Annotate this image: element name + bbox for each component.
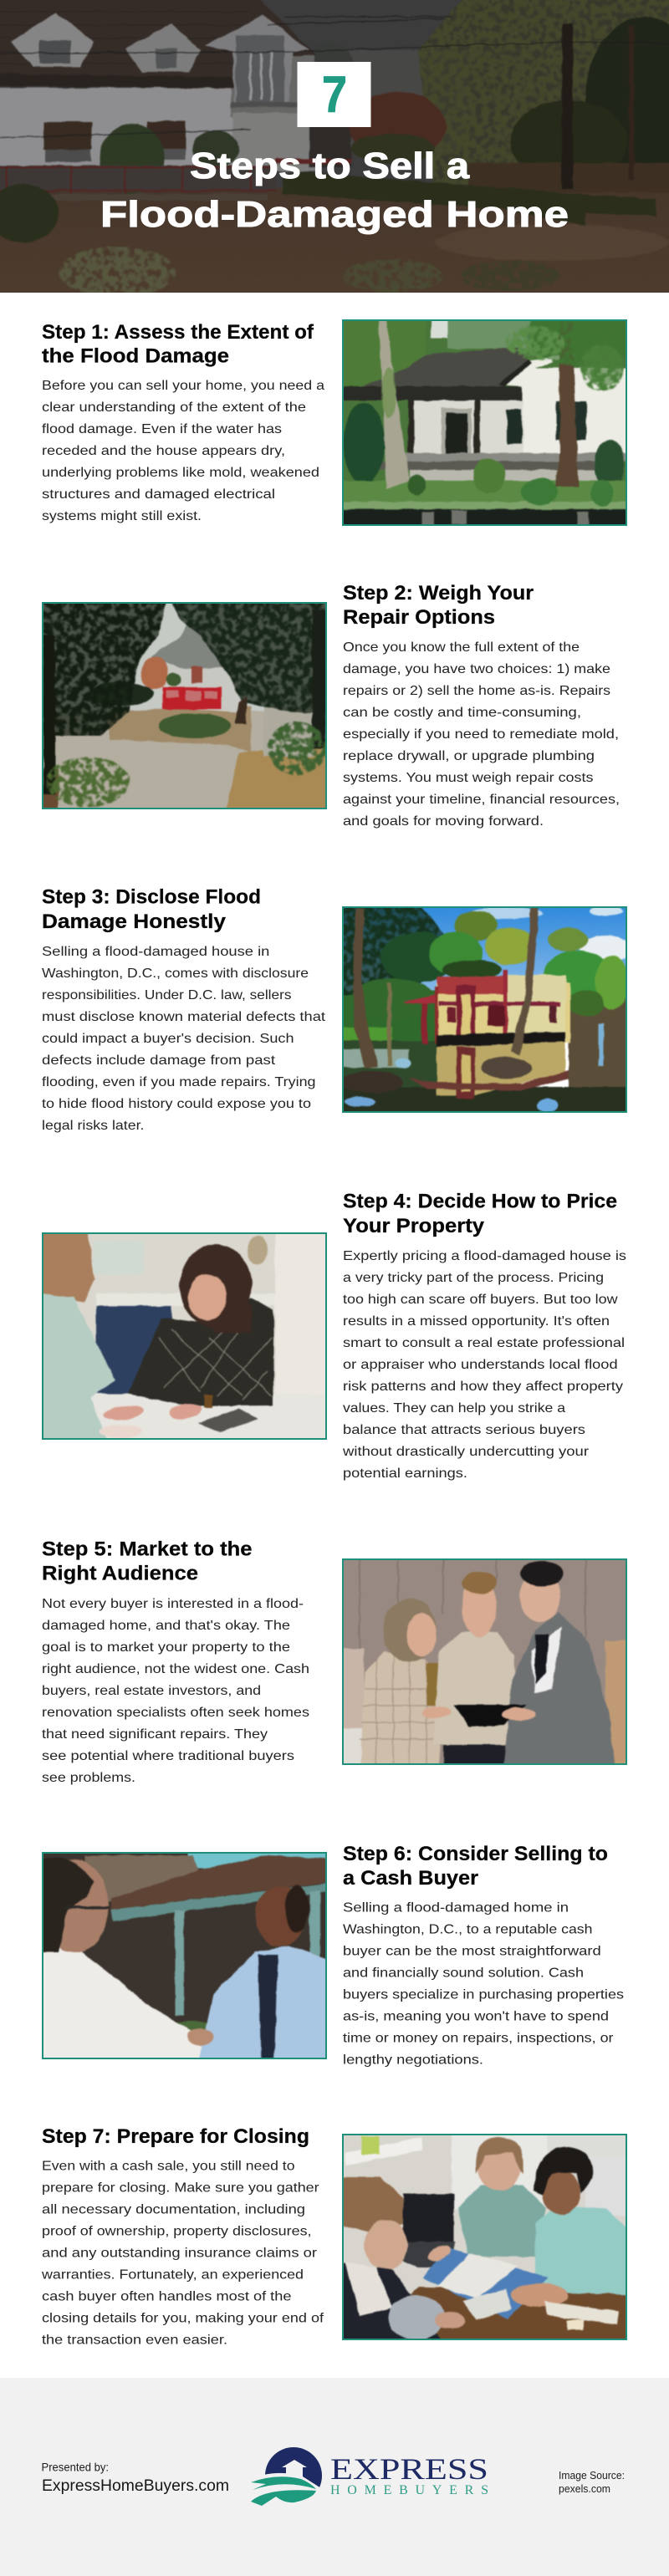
step 4 text: Expertly pricing a flood-damaged house is: [343, 1249, 626, 1263]
step 5 heading: Right Audience: [42, 1563, 198, 1585]
step 2 text: especially if you need to remediate mold,: [343, 727, 619, 742]
step 4 photo: woman reviewing paperwork: [38, 1229, 331, 1443]
step 3 heading: [42, 886, 261, 933]
step 3 text: responsibilities. Under D.C. law, sellers: [42, 988, 292, 1002]
presented by: ExpressHomeBuyers.com: [42, 2477, 229, 2495]
step 4 text: values. They can help you strike a: [343, 1401, 565, 1416]
step 1 text: structures and damaged electrical: [42, 487, 275, 502]
step 3 text: Washington, D.C., comes with disclosure: [42, 967, 309, 981]
step 2 text: against your timeline, financial resources,: [343, 793, 620, 807]
number badge: [298, 62, 371, 127]
step 1 text: clear understanding of the extent of the: [42, 400, 306, 415]
presented by: [42, 2460, 229, 2495]
step 7 text: prepare for closing. Make sure you gather: [42, 2181, 319, 2196]
step 6 text: lengthy negotiations.: [343, 2053, 483, 2067]
step 3 text: defects include damage from past: [42, 1053, 276, 1068]
step 2 heading: Step 2: Weigh Your: [343, 582, 534, 604]
step 7 text: the transaction even easier.: [42, 2333, 227, 2348]
step 6 text: [343, 1901, 624, 2067]
step 6 text: Selling a flood-damaged home in: [343, 1901, 569, 1915]
step 4 text: [342, 1249, 626, 1481]
step 3 text: [42, 945, 326, 1133]
step 4: [38, 1191, 626, 1481]
step 2 text: systems. You must weigh repair costs: [343, 771, 594, 785]
step 1 heading: [42, 321, 314, 368]
step 1 heading: the Flood Damage: [42, 344, 229, 368]
step 6 text: time or money on repairs, inspections, or: [343, 2032, 614, 2045]
step 7 photo: closing meeting at desk: [339, 2130, 631, 2344]
step 5 text: Not every buyer is interested in a flood-: [42, 1597, 304, 1611]
title: Flood-Damaged Home: [100, 194, 569, 235]
step 7 text: proof of ownership, property disclosures,: [42, 2224, 311, 2239]
step 4 heading: Your Property: [343, 1215, 484, 1237]
step 7 text: cash buyer often handles most of the: [42, 2289, 291, 2304]
step 1 heading: Step 1: Assess the Extent of: [42, 321, 314, 344]
step 6 text: as-is, meaning you won't have to spend: [343, 2010, 609, 2023]
step 2 text: [343, 640, 620, 829]
step 2 text: replace drywall, or upgrade plumbing: [343, 749, 595, 763]
logo wordmark: EXPRESS: [330, 2452, 488, 2486]
step 1 text: systems might still exist.: [42, 509, 202, 523]
step 5 text: buyers, real estate investors, and: [42, 1684, 261, 1698]
step 5 text: renovation specialists often seek homes: [42, 1706, 309, 1720]
step 5 text: that need significant repairs. They: [42, 1727, 268, 1742]
step 4 text: smart to consult a real estate professional: [343, 1336, 625, 1350]
step 2 photo: flooded street with trees: [38, 599, 331, 813]
step 2 text: damage, you have two choices: 1) make: [343, 662, 610, 676]
step 4 text: without drastically undercutting your: [342, 1445, 589, 1459]
number badge: 7: [322, 66, 347, 123]
step 6 photo: handshake in front of house: [38, 1849, 331, 2063]
step 3 text: must disclose known material defects that: [42, 1010, 326, 1024]
step 5 text: [42, 1597, 309, 1785]
step 1: [42, 319, 627, 526]
step 1 text: underlying problems like mold, weakened: [42, 466, 319, 480]
logo wordmark: [330, 2452, 488, 2497]
step 7: [41, 2125, 631, 2348]
step 3 text: legal risks later.: [42, 1119, 144, 1133]
header photo: flooded house: [0, 0, 669, 318]
step 3 heading: Step 3: Disclose Flood: [42, 886, 261, 908]
step 2 text: Once you know the full extent of the: [343, 640, 580, 655]
step 3 heading: Damage Honestly: [42, 911, 226, 933]
step 1 text: Before you can sell your home, you need a: [42, 379, 324, 393]
step 4 heading: Step 4: Decide How to Price: [343, 1191, 617, 1213]
step 1 text: receded and the house appears dry,: [42, 444, 285, 458]
logo: [248, 2447, 488, 2507]
step 2 text: and goals for moving forward.: [343, 814, 544, 829]
step 5 photo: three people with clipboard: [339, 1555, 631, 1768]
step 6 text: buyers specialize in purchasing properties: [343, 1988, 624, 2002]
step 3 text: to hide flood history could expose you to: [42, 1097, 311, 1111]
step 4 text: balance that attracts serious buyers: [343, 1423, 585, 1437]
step 5 text: damaged home, and that's okay. The: [42, 1619, 290, 1633]
step 6 text: and financially sound solution. Cash: [343, 1966, 584, 1980]
step 7 text: Even with a cash sale, you still need to: [42, 2159, 295, 2174]
presented by: Presented by:: [42, 2460, 109, 2473]
step 5 text: see potential where traditional buyers: [42, 1749, 294, 1763]
step 2 text: can be costly and time-consuming,: [343, 706, 581, 720]
step 3 text: flooding, even if you made repairs. Trying: [42, 1075, 316, 1089]
step 7 text: warranties. Fortunately, an experienced: [41, 2267, 304, 2283]
step 4 text: risk patterns and how they affect property: [343, 1380, 623, 1394]
step 2 heading: [343, 582, 534, 629]
step 4 text: potential earnings.: [343, 1467, 467, 1481]
step 3 photo: yellow house among palm trees: [339, 903, 633, 1116]
step 5: [42, 1538, 631, 1785]
step 6 heading: [343, 1843, 608, 1890]
footer: [0, 2378, 669, 2576]
title: Steps to Sell a: [190, 145, 470, 186]
step 3 text: could impact a buyer's decision. Such: [42, 1032, 294, 1046]
step 7 text: and any outstanding insurance claims or: [42, 2246, 317, 2261]
step 6: [38, 1843, 624, 2067]
step 5 heading: [42, 1538, 253, 1585]
step 5 text: right audience, not the widest one. Cash: [42, 1662, 309, 1676]
step 1 text: flood damage. Even if the water has: [42, 422, 282, 436]
step 6 heading: a Cash Buyer: [343, 1867, 478, 1890]
step 7 text: all necessary documentation, including: [42, 2202, 305, 2217]
step 6 text: buyer can be the most straightforward: [343, 1945, 601, 1958]
step 6 text: Washington, D.C., to a reputable cash: [343, 1923, 592, 1936]
step 4 heading: [343, 1191, 617, 1237]
step 4 text: results in a missed opportunity. It's often: [343, 1314, 610, 1329]
header banner: [0, 0, 669, 318]
image source: Image Source:: [559, 2469, 625, 2482]
step 1 text: [42, 379, 324, 523]
step 2 heading: Repair Options: [343, 606, 495, 629]
logo wordmark: HOMEBUYERS: [330, 2483, 488, 2497]
step 5 text: see problems.: [42, 1771, 135, 1785]
step 2 text: repairs or 2) sell the home as-is. Repairs: [343, 684, 610, 698]
step 4 text: a very tricky part of the process. Pricing: [343, 1271, 604, 1285]
step 6 heading: Step 6: Consider Selling to: [343, 1843, 608, 1865]
step 7 heading: Step 7: Prepare for Closing: [42, 2125, 309, 2148]
step 7 text: closing details for you, making your end of: [42, 2311, 324, 2326]
step 7 text: [41, 2159, 324, 2348]
step 3 text: Selling a flood-damaged house in: [42, 945, 269, 959]
step 4 text: too high can scare off buyers. But too low: [343, 1293, 618, 1307]
image source: pexels.com: [559, 2482, 610, 2495]
logo icon: house and hill: [248, 2447, 322, 2507]
image source: [559, 2469, 625, 2495]
step 4 text: or appraiser who understands local flood: [343, 1358, 618, 1372]
step 3: [42, 886, 633, 1133]
step 2: [38, 582, 620, 829]
step 5 heading: Step 5: Market to the: [42, 1538, 253, 1560]
step 1 photo: white house among trees: [342, 319, 627, 526]
title: [100, 145, 569, 235]
step 5 text: goal is to market your property to the: [42, 1640, 290, 1655]
